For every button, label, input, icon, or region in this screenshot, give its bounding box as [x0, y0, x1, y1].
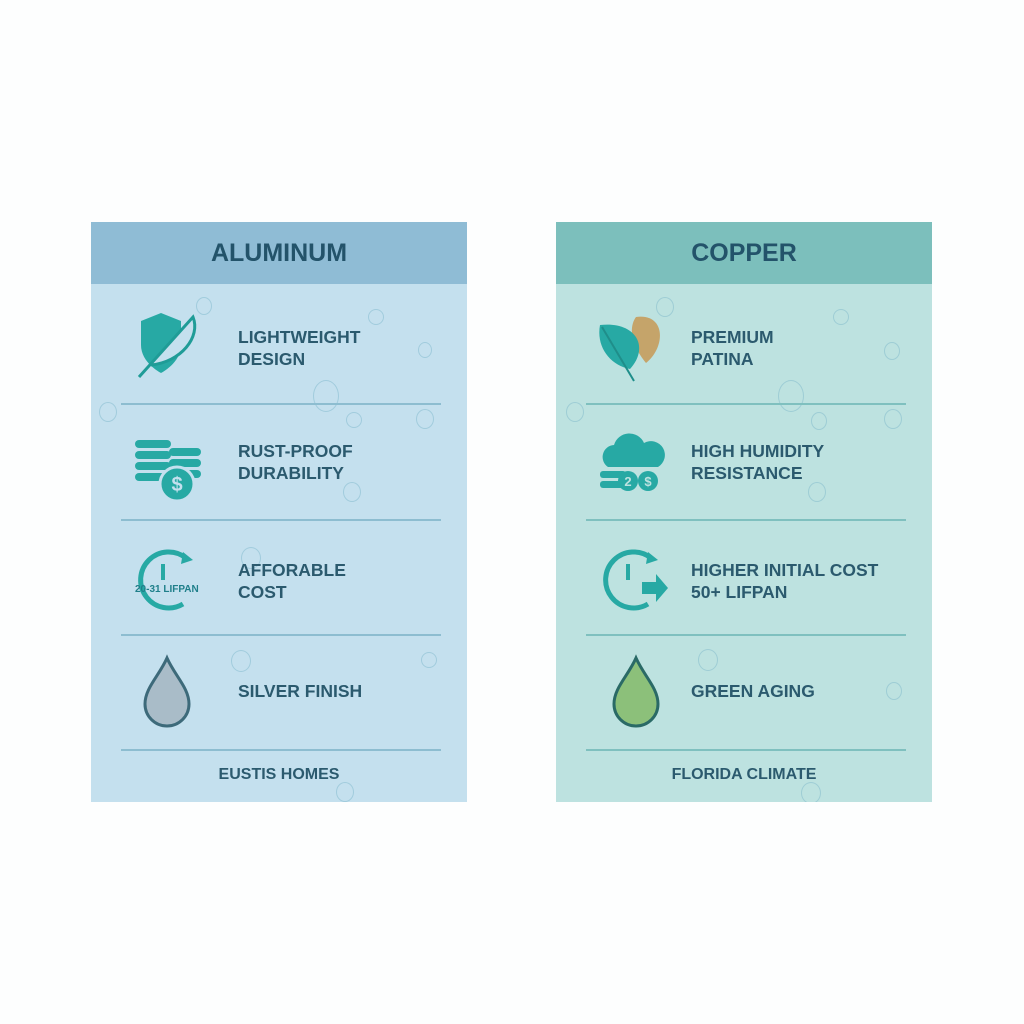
heading: copper: COPPER [691, 239, 797, 267]
heading: aluminum [91, 222, 467, 284]
icon: clock: 20-31 LIFPAN [135, 584, 199, 595]
icon: cloud coins [600, 434, 665, 491]
text: humidity: RESISTANCE [691, 463, 802, 483]
heading: copper [556, 222, 932, 284]
text: green aging: GREEN AGING [691, 681, 815, 701]
text: humidity [691, 441, 824, 483]
text: higher cost [691, 560, 878, 602]
text: premium patina: PREMIUM [691, 327, 774, 347]
heading: aluminum: ALUMINUM [211, 239, 347, 267]
icon: cloud coins: $ [644, 474, 652, 489]
text: rust-proof: RUST-PROOF [238, 441, 353, 461]
text: lightweight [238, 327, 360, 369]
text: affordable [238, 560, 346, 602]
footer: florida climate: FLORIDA CLIMATE [672, 766, 816, 783]
panel: aluminum [91, 222, 467, 802]
text: lightweight: DESIGN [238, 349, 305, 369]
text: lightweight: LIGHTWEIGHT [238, 327, 360, 347]
text: premium patina: PATINA [691, 349, 754, 369]
icon: coins: $ [171, 474, 183, 496]
text: rust-proof: DURABILITY [238, 463, 344, 483]
icon: shield feather [138, 313, 196, 378]
text: silver finish: SILVER FINISH [238, 681, 362, 701]
text: rust-proof [238, 441, 353, 483]
icon: cloud coins: 2 [624, 474, 632, 489]
icon: silver drop [144, 654, 190, 728]
icon: green drop [612, 654, 660, 728]
icon: leaves [599, 316, 660, 382]
icon: clock [135, 550, 199, 610]
icon: clock arrow [603, 550, 668, 610]
text: humidity: HIGH HUMIDITY [691, 441, 824, 461]
text: higher cost: 50+ LIFPAN [691, 582, 787, 602]
footer: eustis homes: EUSTIS HOMES [219, 766, 339, 783]
text: affordable: AFFORABLE [238, 560, 346, 580]
text: higher cost: HIGHER INITIAL COST [691, 560, 878, 580]
icon: coins [135, 440, 201, 500]
text: affordable: COST [238, 582, 287, 602]
text: premium patina [691, 327, 774, 369]
panel: copper [556, 222, 932, 802]
